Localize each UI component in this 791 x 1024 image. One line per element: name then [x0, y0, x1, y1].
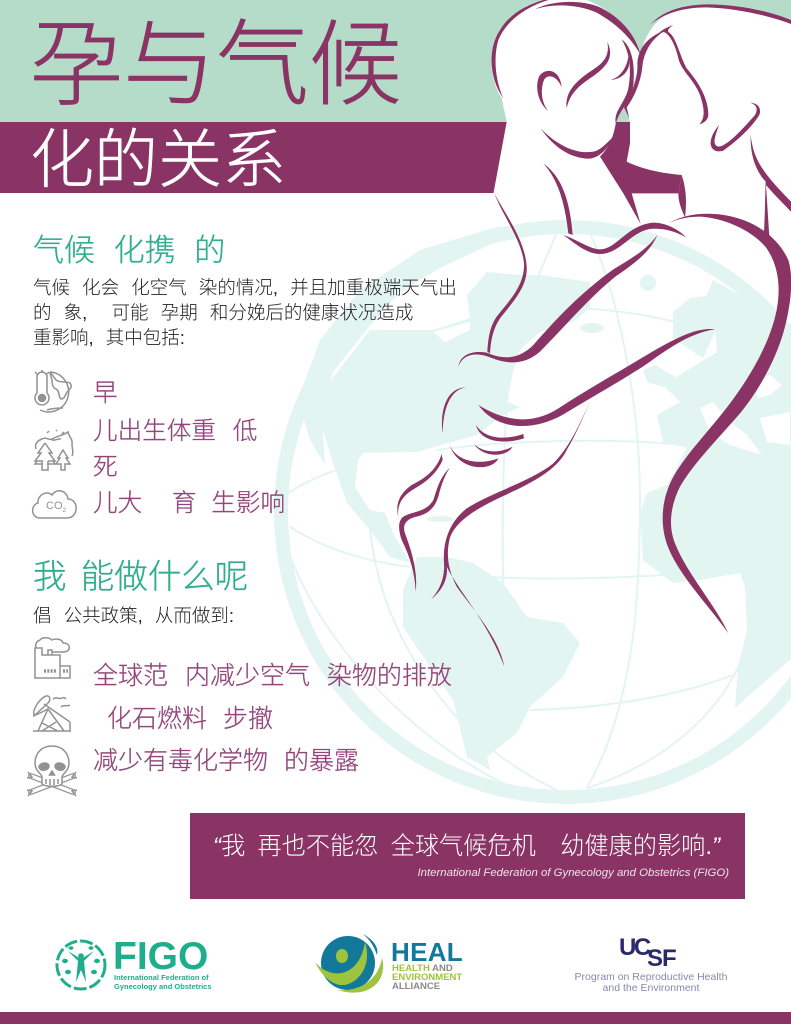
icon: thermometer and earth: [34, 370, 72, 413]
white silhouette over bands: [491, 0, 791, 224]
icon: CO2 cloud: [32, 490, 77, 519]
heading: climate risks: 气候 化携 的: [33, 233, 225, 268]
HEAL subtitle: HEALTH AND ENVIRONMENT ALLIANCE: [392, 963, 462, 992]
logo: HEAL: [315, 934, 463, 993]
logo: UCSF: [575, 934, 727, 994]
icon: CO2 cloud: CO: [46, 500, 63, 512]
title line 1: 孕与气候: [30, 13, 402, 117]
list item: death: 死: [93, 454, 118, 481]
list: health effects: 早: [93, 380, 118, 407]
icon: skull and crossbones: [26, 745, 78, 796]
FIGO wordmark: FIGO: [113, 935, 208, 978]
icon: wildfire and trees: [34, 430, 74, 471]
footer band: [0, 1012, 791, 1024]
subheading text: 倡 公共政策, 从而做到:: [33, 605, 234, 626]
UCSF wordmark bottom: SF: [647, 945, 676, 972]
quote panel: [190, 813, 745, 899]
mother and child line drawing: [397, 0, 791, 667]
list item: reduce toxic exposure: 减少有毒化学物 的暴露: [93, 747, 359, 775]
quote source: International Federation of Gynecology and Obstetrics (FIGO): [418, 867, 729, 879]
green header band: [0, 0, 791, 122]
list item: phase out fossil fuels: 化石燃料 步撤: [107, 705, 273, 733]
icon: CO2 cloud: 2: [62, 507, 66, 514]
UCSF subtitle: Program on Reproductive Health and the Environment: [575, 971, 727, 994]
UCSF wordmark top: UC: [619, 934, 649, 961]
list item: development: 儿大 育 生影响: [93, 490, 285, 517]
list item: birth weight: 儿出生体重 低: [93, 418, 257, 445]
globe: [281, 226, 791, 797]
icon: oil pump jack: [32, 695, 71, 732]
quote text: “我 再也不能忽 全球气候危机 幼健康的影响.”: [213, 833, 720, 860]
purple header band: [0, 122, 791, 193]
FIGO subtitle: International Federation of Gynecology and Obstetrics: [114, 973, 212, 991]
logo: FIGO: [56, 935, 212, 991]
list item: reduce emissions: 全球范 内减少空气 染物的排放: [93, 662, 452, 690]
icon: factory: [34, 637, 71, 679]
heading: what can we do: 我 能做什么呢: [33, 559, 248, 596]
HEAL wordmark: HEAL: [391, 937, 463, 967]
intro paragraph: 气候 化会 化空气 染的情况, 并且加重极端天气出 的 象, 可能 孕期 和分娩后的健康状况造成 重影响, 其中包括:: [33, 277, 457, 348]
title line 2: 化的关系: [30, 124, 286, 196]
